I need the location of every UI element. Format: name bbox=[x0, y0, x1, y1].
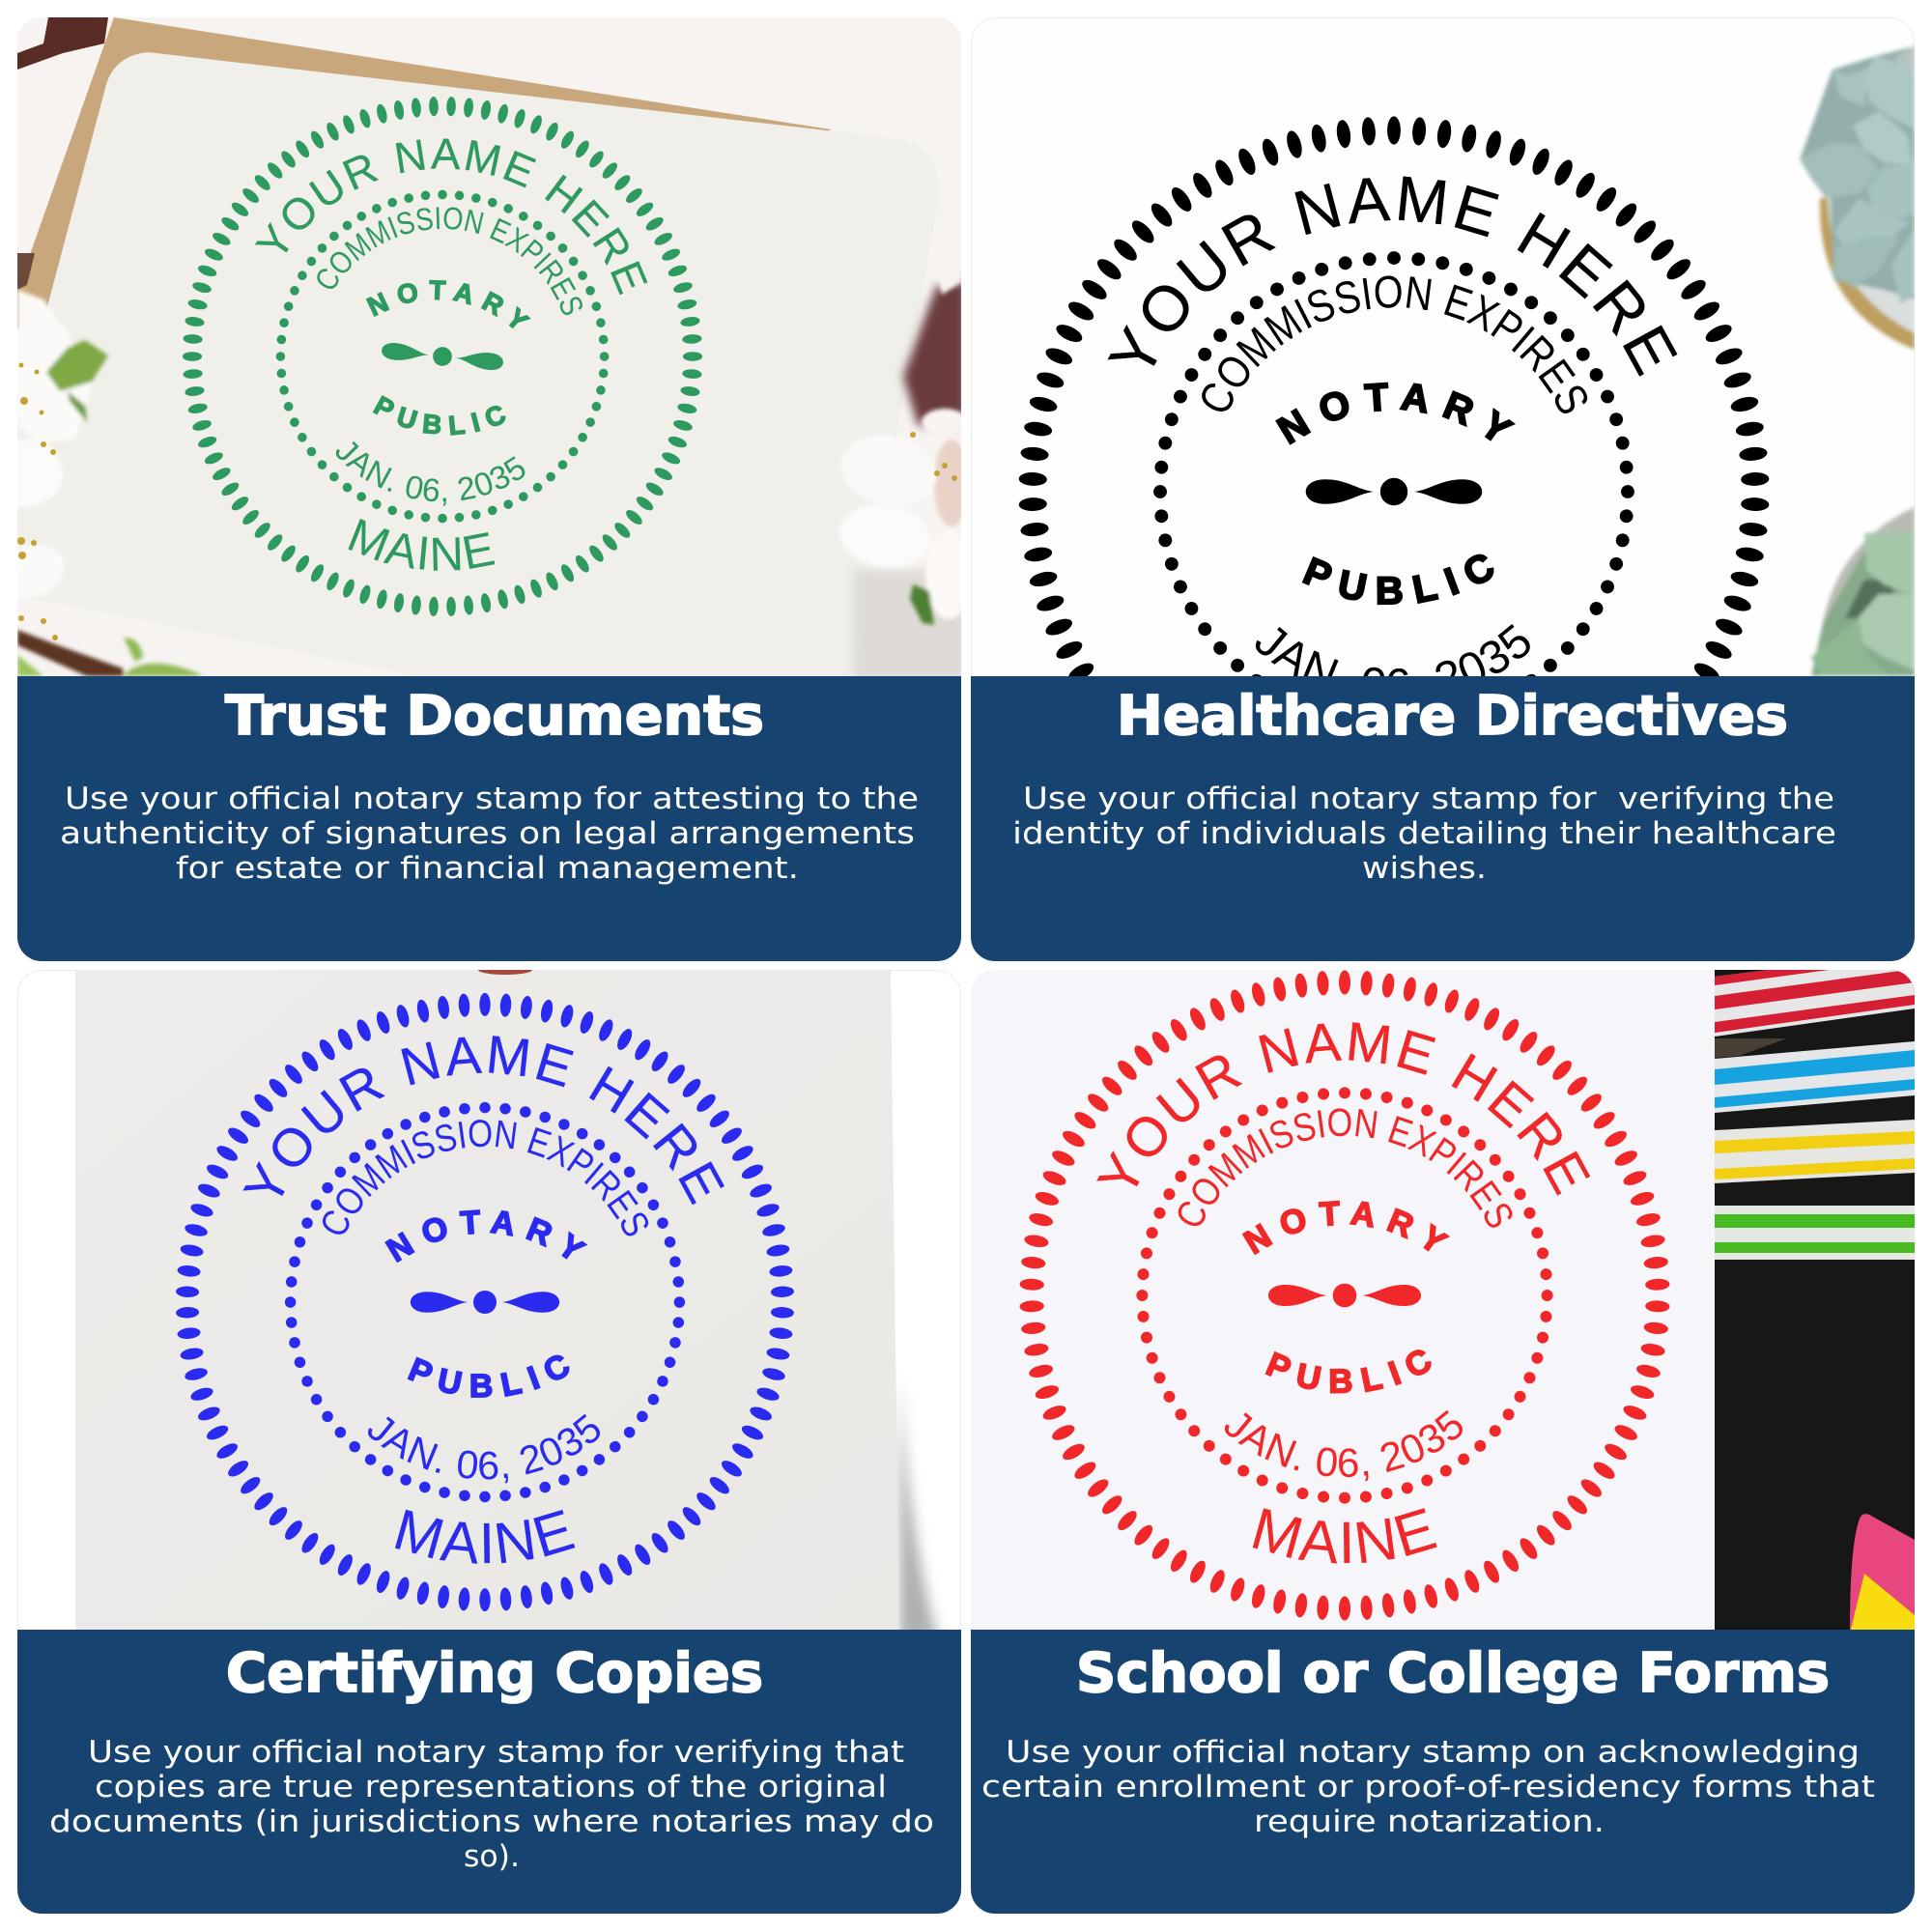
photo: white paper beside striped pencils on dark wood bbox=[971, 952, 1915, 1646]
stamp: red notary seal: PUBLIC bbox=[1265, 1350, 1432, 1393]
panel: Trust Documents text bbox=[17, 676, 961, 961]
heading: Certifying Copies bbox=[226, 1642, 763, 1705]
body text: documents (in jurisdictions where notaries may do bbox=[49, 1804, 934, 1839]
card: Trust Documents bbox=[17, 17, 961, 961]
stamp: blue notary seal: MAINE bbox=[395, 1509, 576, 1564]
stamp: red notary seal: YOUR NAME HERE bbox=[1096, 1022, 1590, 1196]
stamp: green notary seal: JAN. 06, 2035 bbox=[336, 440, 526, 506]
heading: School or College Forms bbox=[1076, 1642, 1830, 1705]
photo: paper on envelope with blossoms bbox=[0, 17, 972, 696]
body text: wishes. bbox=[1362, 851, 1487, 886]
body text: for estate or financial management. bbox=[176, 851, 799, 886]
panel: Certifying Copies text bbox=[17, 1630, 961, 1914]
stamp: black notary seal bbox=[1018, 116, 1770, 676]
body text: require notarization. bbox=[1254, 1804, 1605, 1839]
stamp: red notary seal: MAINE bbox=[1252, 1508, 1437, 1563]
body text: Use your official notary stamp for attesting to the bbox=[65, 781, 919, 816]
stamp: blue notary seal: PUBLIC bbox=[408, 1354, 570, 1398]
stamp: green notary seal: COMMISSION EXPIRES bbox=[317, 207, 582, 315]
body text: Use your official notary stamp for verifying that bbox=[88, 1735, 904, 1770]
stamp: blue notary seal: NOTARY bbox=[384, 1209, 587, 1264]
card: School or College Forms bbox=[971, 970, 1915, 1914]
body text: certain enrollment or proof-of-residency forms that bbox=[981, 1770, 1875, 1804]
stamp: green notary seal: NOTARY bbox=[365, 280, 531, 328]
panel: School or College Forms text bbox=[971, 1630, 1915, 1914]
stamp: blue notary seal: COMMISSION EXPIRES bbox=[323, 1120, 649, 1236]
stamp: green notary seal: PUBLIC bbox=[373, 395, 506, 436]
stamp: green notary seal: YOUR NAME HERE bbox=[255, 139, 647, 296]
stamp: green notary seal bbox=[182, 97, 703, 616]
stamp: blue notary seal: JAN. 06, 2035 bbox=[368, 1414, 600, 1484]
body text bbox=[60, 781, 919, 886]
stamp: black notary seal: YOUR NAME HERE bbox=[1107, 176, 1677, 377]
card: Certifying Copies bbox=[17, 970, 961, 1914]
heading: Trust Documents bbox=[225, 685, 764, 748]
stamp: red notary seal: JAN. 06, 2035 bbox=[1225, 1410, 1463, 1482]
stamp: red notary seal bbox=[1020, 970, 1669, 1621]
stamp: black notary seal: PUBLIC bbox=[1302, 554, 1493, 605]
heading: Healthcare Directives bbox=[1117, 685, 1788, 748]
stamp: black notary seal: NOTARY bbox=[1275, 383, 1516, 445]
stamp: black notary seal: COMMISSION EXPIRES bbox=[1202, 275, 1588, 413]
body text: authenticity of signatures on legal arrangements bbox=[60, 816, 915, 851]
body text bbox=[981, 1735, 1875, 1839]
body text bbox=[1015, 786, 1835, 879]
stamp: blue notary seal bbox=[176, 993, 794, 1611]
stamp: black notary seal: JAN. 06, 2035 bbox=[1256, 624, 1530, 676]
stamp: red notary seal: COMMISSION EXPIRES bbox=[1179, 1108, 1513, 1228]
body text bbox=[49, 1735, 934, 1874]
stamp: red notary seal: NOTARY bbox=[1242, 1200, 1451, 1256]
body text: Use your official notary stamp on acknowledging bbox=[1006, 1735, 1860, 1770]
card: Healthcare Directives bbox=[971, 17, 1915, 961]
body text: so). bbox=[464, 1839, 520, 1874]
body text: Use your official notary stamp for verifying the bbox=[1023, 781, 1834, 816]
photo: held paper sheet bbox=[17, 965, 961, 1646]
body text: copies are true representations of the original bbox=[95, 1770, 887, 1804]
photo: white desk with succulents bbox=[971, 17, 1915, 694]
stamp: blue notary seal: YOUR NAME HERE bbox=[243, 1036, 724, 1206]
body text: identity of individuals detailing their healthcare bbox=[1012, 816, 1836, 851]
stamp: green notary seal: MAINE bbox=[348, 519, 495, 571]
panel: Healthcare Directives text bbox=[971, 676, 1915, 961]
